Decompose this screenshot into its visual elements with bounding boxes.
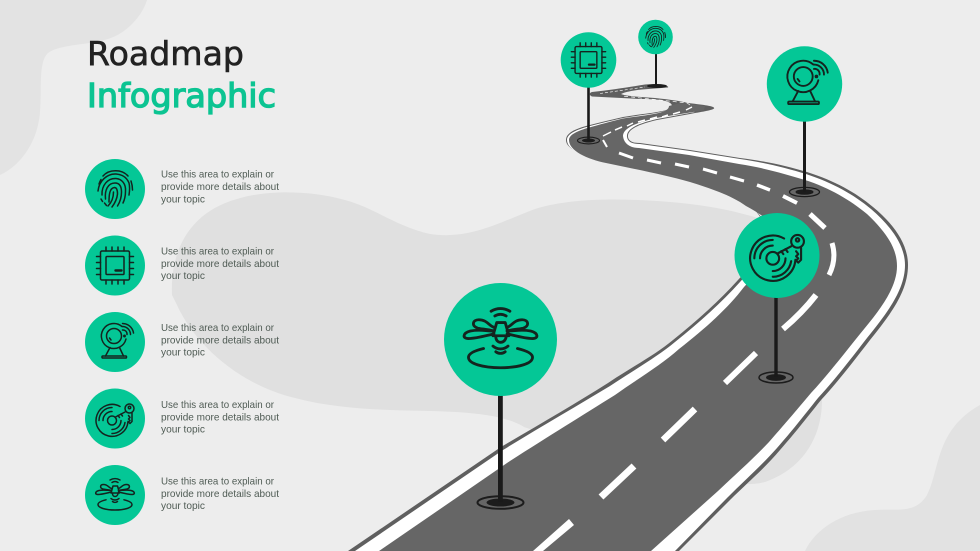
background blob: top left: [0, 0, 147, 175]
legend item 1: fingerprint: Use this area to explain or: [161, 170, 274, 180]
legend item 3: webcam: your topic: [161, 348, 205, 358]
winding road: [348, 84, 908, 551]
legend item 5: drone: Use this area to explain or: [161, 476, 274, 488]
legend item 1: fingerprint: your topic: [161, 194, 205, 206]
background blob: bottom right: [805, 405, 980, 551]
road outer edge: [348, 84, 908, 551]
legend item 2: chip: [85, 236, 279, 296]
pin 1: drone: [444, 283, 557, 509]
road asphalt: [379, 103, 897, 551]
legend item 3: webcam: [85, 312, 279, 372]
legend item 5: drone: [85, 465, 279, 525]
road white edge lines: [355, 106, 905, 551]
legend item 5: drone: your topic: [161, 501, 205, 512]
pin 3: webcam: [767, 46, 842, 197]
legend item 1: fingerprint: provide more details about: [161, 182, 279, 193]
pin 5: fingerprint (far): [638, 20, 673, 88]
legend item 4: disc and key: provide more details about: [161, 412, 279, 424]
legend item 5: drone: provide more details about: [161, 489, 279, 500]
title: [87, 34, 276, 115]
title line: Roadmap: Roadmap: [87, 34, 244, 73]
legend item 3: webcam: Use this area to explain or: [161, 323, 274, 334]
legend item 4: disc and key: [85, 388, 279, 448]
legend item 4: disc and key: your topic: [161, 424, 205, 436]
road centre dashes: [533, 87, 834, 551]
pin 4: chip: [561, 32, 616, 144]
legend item 3: webcam: provide more details about: [161, 336, 279, 346]
legend item 2: chip: your topic: [161, 271, 205, 282]
legend item 2: chip: Use this area to explain or: [161, 246, 274, 258]
legend item 2: chip: provide more details about: [161, 259, 279, 270]
legend list: [85, 159, 279, 525]
pin 2: disc and key: [734, 213, 820, 383]
background blob: centre: [172, 192, 822, 484]
title line: Infographic: Infographic: [87, 76, 276, 115]
legend item 1: fingerprint: [85, 159, 279, 219]
legend item 4: disc and key: Use this area to explain or: [161, 400, 274, 411]
